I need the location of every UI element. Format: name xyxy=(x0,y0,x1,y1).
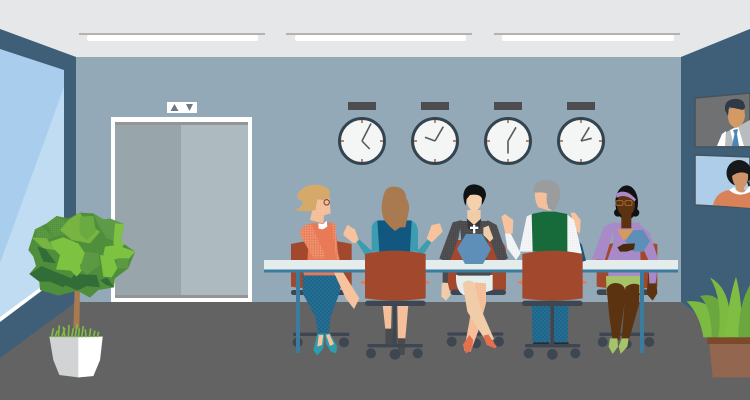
front chair right xyxy=(518,251,587,360)
gray-haired man seen from behind xyxy=(501,180,586,347)
dark-haired woman with headband xyxy=(592,185,658,354)
floor xyxy=(0,302,750,400)
clock 2 xyxy=(412,102,458,164)
potted plant, right xyxy=(687,277,750,377)
pot grass xyxy=(52,324,99,337)
tree pot xyxy=(49,337,103,377)
tree trunk xyxy=(73,290,80,328)
front chair left xyxy=(360,251,430,360)
right person chair xyxy=(597,242,657,349)
elevator xyxy=(111,117,252,302)
ceiling xyxy=(0,0,750,57)
clock 1 xyxy=(340,102,384,164)
video screen: woman with headset xyxy=(695,155,750,208)
center woman xyxy=(439,184,508,353)
clock 4 xyxy=(558,102,604,164)
ceiling lights xyxy=(79,33,680,41)
left person chair xyxy=(291,240,352,347)
elevator indicator xyxy=(167,102,197,113)
blonde woman xyxy=(294,185,359,356)
video screen: man xyxy=(695,93,750,147)
center woman tablet xyxy=(457,234,491,264)
potted tree xyxy=(28,213,135,377)
left wall xyxy=(0,29,76,358)
conference table xyxy=(264,260,678,353)
right wall xyxy=(681,29,750,358)
foliage xyxy=(28,213,135,298)
center person chair xyxy=(447,240,506,348)
woman seen from behind, teal top xyxy=(343,187,443,355)
clock 3 xyxy=(486,102,530,164)
window xyxy=(0,49,64,322)
